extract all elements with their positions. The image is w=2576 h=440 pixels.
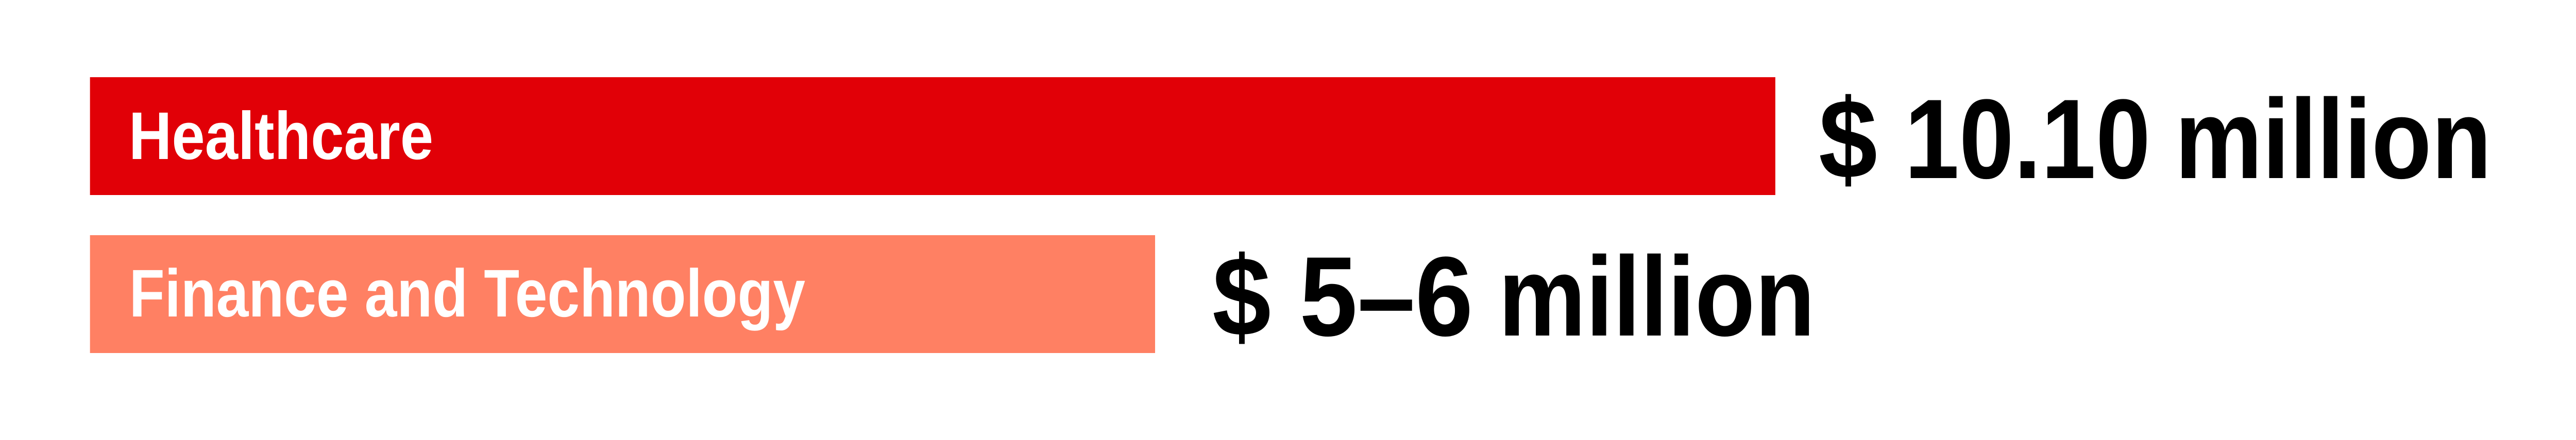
value: finance and technology: $ <box>1212 234 1271 360</box>
value: finance and technology: 5–6 <box>1299 234 1473 360</box>
value: finance and technology: million <box>1498 234 1815 360</box>
label: healthcare: Healthcare <box>129 98 433 173</box>
value: healthcare: 10.10 <box>1905 76 2150 202</box>
bar: healthcare <box>90 77 1775 195</box>
value: healthcare: million <box>2175 76 2492 202</box>
bar: finance and technology <box>90 235 1155 353</box>
value: healthcare: $ <box>1819 76 1877 202</box>
label: finance and technology: Finance and Technology <box>129 256 805 331</box>
value: healthcare <box>1819 76 2492 202</box>
value: finance and technology <box>1212 234 1815 360</box>
